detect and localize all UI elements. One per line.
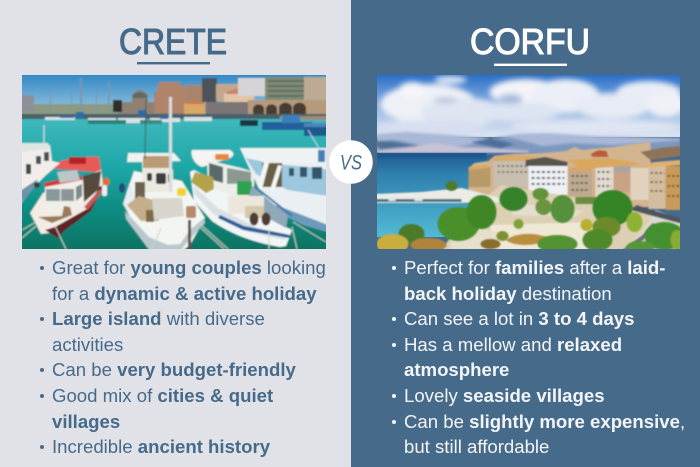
- panel: Corfu: [351, 0, 700, 467]
- pier: [374, 188, 499, 203]
- VS badge: [329, 140, 373, 184]
- mooring ropes: [22, 222, 326, 249]
- bullet list: Corfu: Can be slightly more expensive,: [404, 411, 685, 432]
- VS badge: VS: [340, 152, 362, 174]
- bullet list: Crete: Great for young couples looking: [52, 257, 326, 278]
- bullet list: Crete: Can be very budget-friendly: [52, 359, 296, 380]
- trees: [376, 181, 684, 254]
- bullet list: Crete: villages: [52, 411, 120, 432]
- bullet list: Crete: activities: [52, 334, 123, 355]
- road & plaza: [440, 185, 680, 251]
- bullet list: Crete: for a dynamic & active holiday: [52, 283, 317, 304]
- photo: Crete harbour with fishing boats: [22, 75, 326, 249]
- bullet list: Crete: Good mix of cities & quiet: [52, 385, 273, 406]
- bullet list: Crete: Incredible ancient history: [52, 436, 270, 457]
- bullet list: Crete: [40, 257, 326, 457]
- heading: Corfu: CORFU: [470, 21, 590, 62]
- far right boat: [240, 148, 328, 232]
- town: [468, 142, 650, 207]
- bullet list: Crete: Large island with diverse: [52, 308, 265, 329]
- bullet list: Corfu: Can see a lot in 3 to 4 days: [404, 308, 634, 329]
- panel: Crete: [0, 0, 351, 467]
- red boat: [30, 169, 103, 234]
- heading: Crete: CRETE: [119, 21, 227, 62]
- bullet list: Corfu: Has a mellow and relaxed: [404, 334, 622, 355]
- right boat: [190, 170, 292, 247]
- bullet list: Corfu: but still affordable: [404, 436, 549, 457]
- bullet list: Corfu: Perfect for families after a laid-: [404, 257, 665, 278]
- bullet list: Corfu: [392, 257, 685, 457]
- left boat: [20, 145, 60, 205]
- bullet list: Corfu: back holiday destination: [404, 283, 612, 304]
- photo: Corfu town seafront: [377, 75, 680, 249]
- centre boat: [124, 171, 205, 251]
- bullet list: Corfu: atmosphere: [404, 359, 509, 380]
- bullet list: Corfu: Lovely seaside villages: [404, 385, 605, 406]
